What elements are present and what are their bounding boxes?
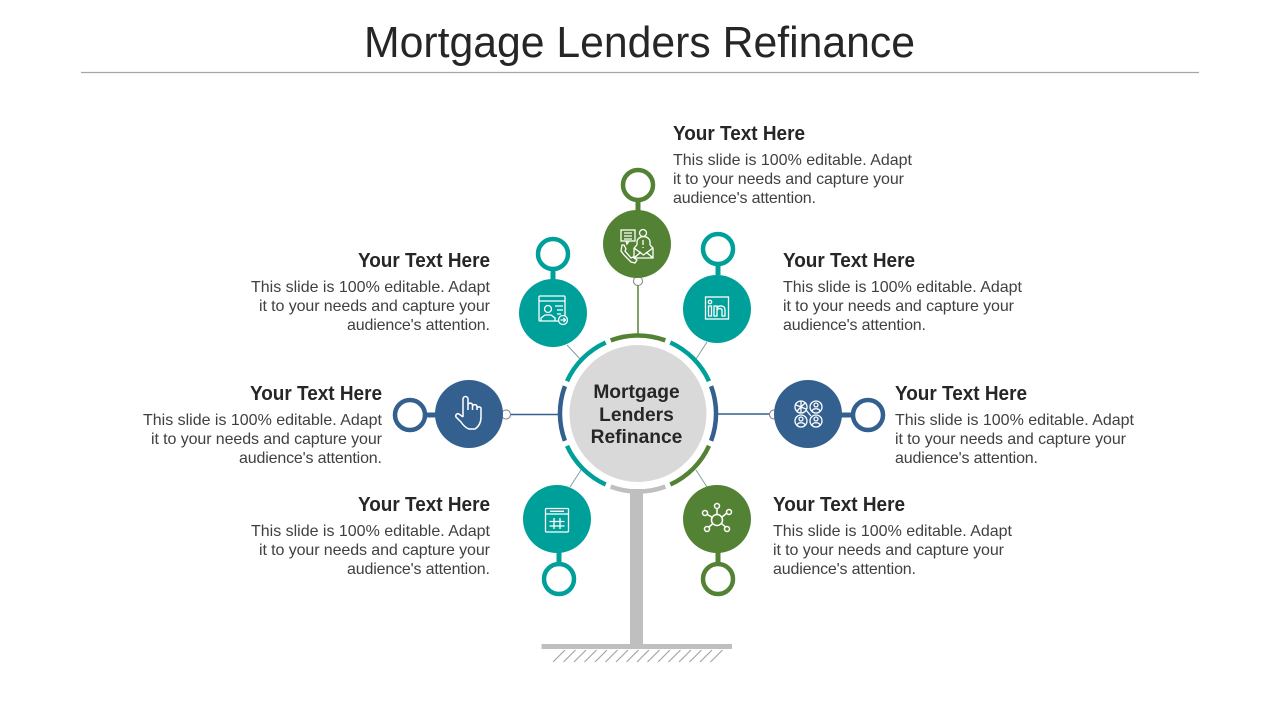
text block: right: Your Text Here	[895, 383, 1027, 405]
text block: upper left	[251, 250, 491, 334]
text block: top	[673, 123, 913, 207]
text block: upper right	[783, 250, 1023, 334]
text block: upper right: it to your needs and capture your	[783, 298, 1015, 315]
text block: upper right: This slide is 100% editable. Adapt	[783, 279, 1023, 296]
text block: lower left: audience's attention.	[347, 561, 490, 578]
text block: lower left: This slide is 100% editable. Adapt	[251, 523, 491, 540]
text block: top: audience's attention.	[673, 190, 816, 207]
icon: profile window	[539, 296, 568, 324]
node: left blue	[395, 380, 503, 448]
text block: lower right	[773, 494, 1013, 578]
text block: right: This slide is 100% editable. Adapt	[895, 412, 1135, 429]
center hub	[560, 335, 716, 492]
node: lower right green	[683, 485, 751, 594]
text block: lower right: This slide is 100% editable. Adapt	[773, 523, 1013, 540]
title: Mortgage Lenders Refinance	[364, 18, 915, 67]
text block: left: audience's attention.	[239, 450, 382, 467]
text block: top: it to your needs and capture your	[673, 171, 905, 188]
center label: Refinance	[591, 427, 683, 448]
text block: upper left: audience's attention.	[347, 317, 490, 334]
icon: hashtag page	[546, 508, 568, 532]
icon: connected people	[795, 401, 822, 427]
node: top green	[603, 170, 671, 278]
text block: top: This slide is 100% editable. Adapt	[673, 152, 913, 169]
center label: Mortgage	[593, 382, 680, 403]
icon: linkedin	[706, 297, 728, 319]
text block: lower left: it to your needs and capture your	[259, 542, 491, 559]
text block: lower left	[251, 494, 491, 578]
text block: left: This slide is 100% editable. Adapt	[143, 412, 383, 429]
center circle	[570, 345, 706, 482]
text block: upper right: audience's attention.	[783, 317, 926, 334]
text block: top: Your Text Here	[673, 123, 805, 145]
node: upper left teal	[519, 239, 587, 347]
node: lower left teal	[523, 485, 591, 594]
segmented ring	[560, 335, 716, 492]
node: right blue	[774, 380, 883, 448]
icon: pointing hand	[456, 396, 481, 429]
node: upper right teal	[683, 234, 751, 343]
text block: right: audience's attention.	[895, 450, 1038, 467]
text block: right	[895, 383, 1135, 467]
text block: lower right: it to your needs and capture your	[773, 542, 1005, 559]
text block: upper left: This slide is 100% editable. Adapt	[251, 279, 491, 296]
text block: lower right: audience's attention.	[773, 561, 916, 578]
text block: left: Your Text Here	[250, 383, 382, 405]
text block: left	[143, 383, 383, 467]
connector lines	[502, 276, 778, 487]
icon: network hub	[702, 504, 732, 532]
text block: upper right: Your Text Here	[783, 250, 915, 272]
text block: lower left: Your Text Here	[358, 494, 490, 516]
center label: Lenders	[599, 405, 674, 426]
text block: left: it to your needs and capture your	[151, 431, 383, 448]
icon: phone, chat and envelope	[621, 230, 653, 263]
text block: right: it to your needs and capture your	[895, 431, 1127, 448]
text block: upper left: it to your needs and capture your	[259, 298, 491, 315]
center label	[591, 382, 683, 448]
stand: pole and ground	[542, 489, 732, 662]
text block: upper left: Your Text Here	[358, 250, 490, 272]
text block: lower right: Your Text Here	[773, 494, 905, 516]
